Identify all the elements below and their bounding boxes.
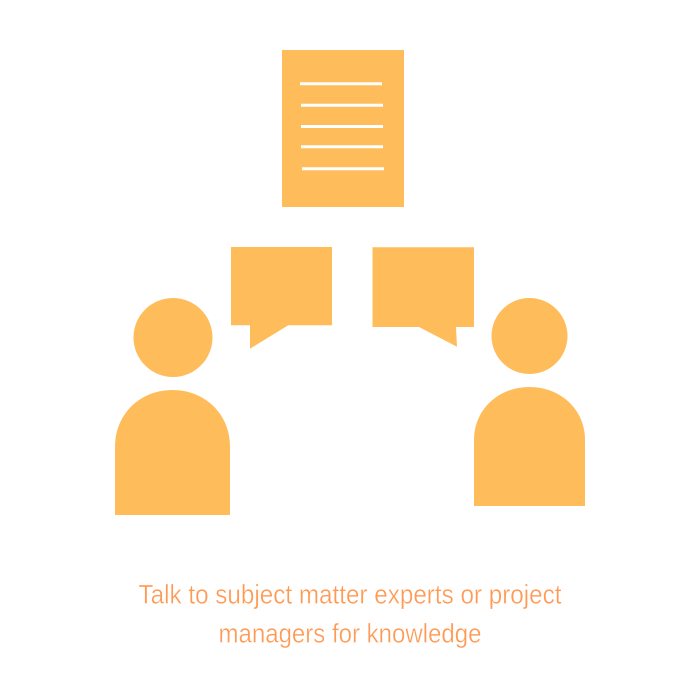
icon: right person	[474, 298, 585, 506]
icon: document	[282, 50, 404, 207]
icon: left speech bubble	[231, 247, 332, 349]
icon: left person	[115, 298, 230, 515]
caption: managers for knowledge	[218, 618, 482, 648]
caption: Talk to subject matter experts or project	[138, 580, 562, 610]
caption	[138, 580, 562, 648]
icon: right speech bubble	[372, 247, 474, 347]
